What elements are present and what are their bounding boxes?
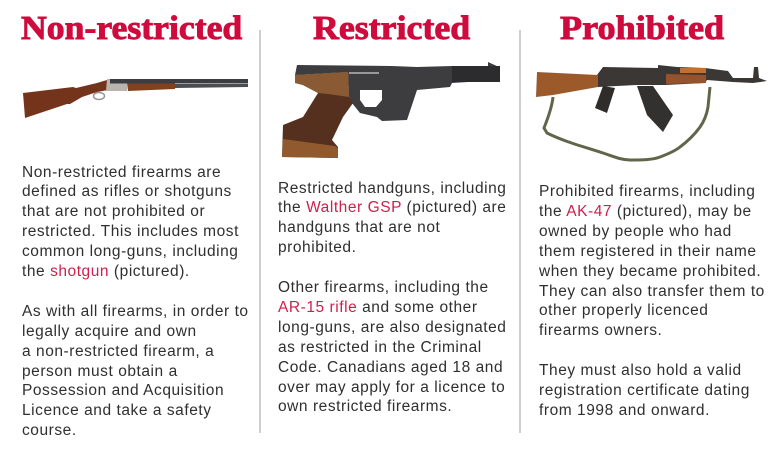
text: prohibited description: They can also transfer them to <box>539 283 765 300</box>
text: restricted description: long-guns, are also designated <box>278 319 506 336</box>
text: prohibited description: when they became prohibited. <box>539 263 761 280</box>
text: prohibited description: other properly licenced <box>539 302 708 319</box>
icon: Walther GSP pistol <box>282 62 500 158</box>
text: non-restricted description: common long-guns, including <box>22 243 238 260</box>
heading: Non-restricted: Non-restricted <box>21 10 242 47</box>
text: restricted description: handguns that are not <box>278 219 440 236</box>
text: prohibited description: the AK-47 (pictured), may be <box>539 203 752 220</box>
text: restricted description: the Walther GSP (pictured) are <box>278 199 506 216</box>
text: prohibited description: owned by people who had <box>539 223 732 240</box>
text: prohibited description: them registered in their name <box>539 243 757 260</box>
text: restricted description: over may apply for a licence to <box>278 379 505 396</box>
text: prohibited description <box>539 183 765 419</box>
text: restricted description: AR-15 rifle and some other <box>278 299 478 316</box>
text: prohibited description: They must also hold a valid <box>539 362 742 379</box>
icon: shotgun <box>23 79 248 118</box>
text: restricted description: Other firearms, including the <box>278 279 489 296</box>
text: non-restricted description: restricted. This includes most <box>22 223 239 240</box>
text: non-restricted description: a non-restricted firearm, a <box>22 343 214 360</box>
text: non-restricted description: the shotgun (pictured). <box>22 263 190 280</box>
text: non-restricted description: person must obtain a <box>22 363 178 380</box>
icon: AK-47 rifle with sling <box>536 65 767 162</box>
text: non-restricted description: legally acquire and own <box>22 323 197 340</box>
heading: Prohibited: Prohibited <box>560 10 724 47</box>
text: non-restricted description <box>22 164 249 439</box>
text: restricted description: as restricted in the Criminal <box>278 339 482 356</box>
text: restricted description: prohibited. <box>278 239 356 256</box>
text: non-restricted description: defined as rifles or shotguns <box>22 183 232 200</box>
text: prohibited description: from 1998 and onward. <box>539 402 710 419</box>
text: restricted description: own restricted firearms. <box>278 398 452 415</box>
text: non-restricted description: As with all firearms, in order to <box>22 303 249 320</box>
text: non-restricted description: that are not prohibited or <box>22 203 205 220</box>
text: non-restricted description: Possession and Acquisition <box>22 382 224 399</box>
heading: Restricted: Restricted <box>313 10 470 47</box>
text: restricted description: Restricted handguns, including <box>278 180 506 196</box>
text: restricted description: Code. Canadians aged 18 and <box>278 359 503 376</box>
text: non-restricted description: course. <box>22 422 77 439</box>
text: restricted description <box>278 180 506 415</box>
text: prohibited description: Prohibited firearms, including <box>539 183 755 200</box>
text: prohibited description: firearms owners. <box>539 322 662 339</box>
text: prohibited description: registration certificate dating <box>539 382 750 399</box>
text: non-restricted description: Licence and take a safety <box>22 402 212 419</box>
text: non-restricted description: Non-restricted firearms are <box>22 164 221 180</box>
